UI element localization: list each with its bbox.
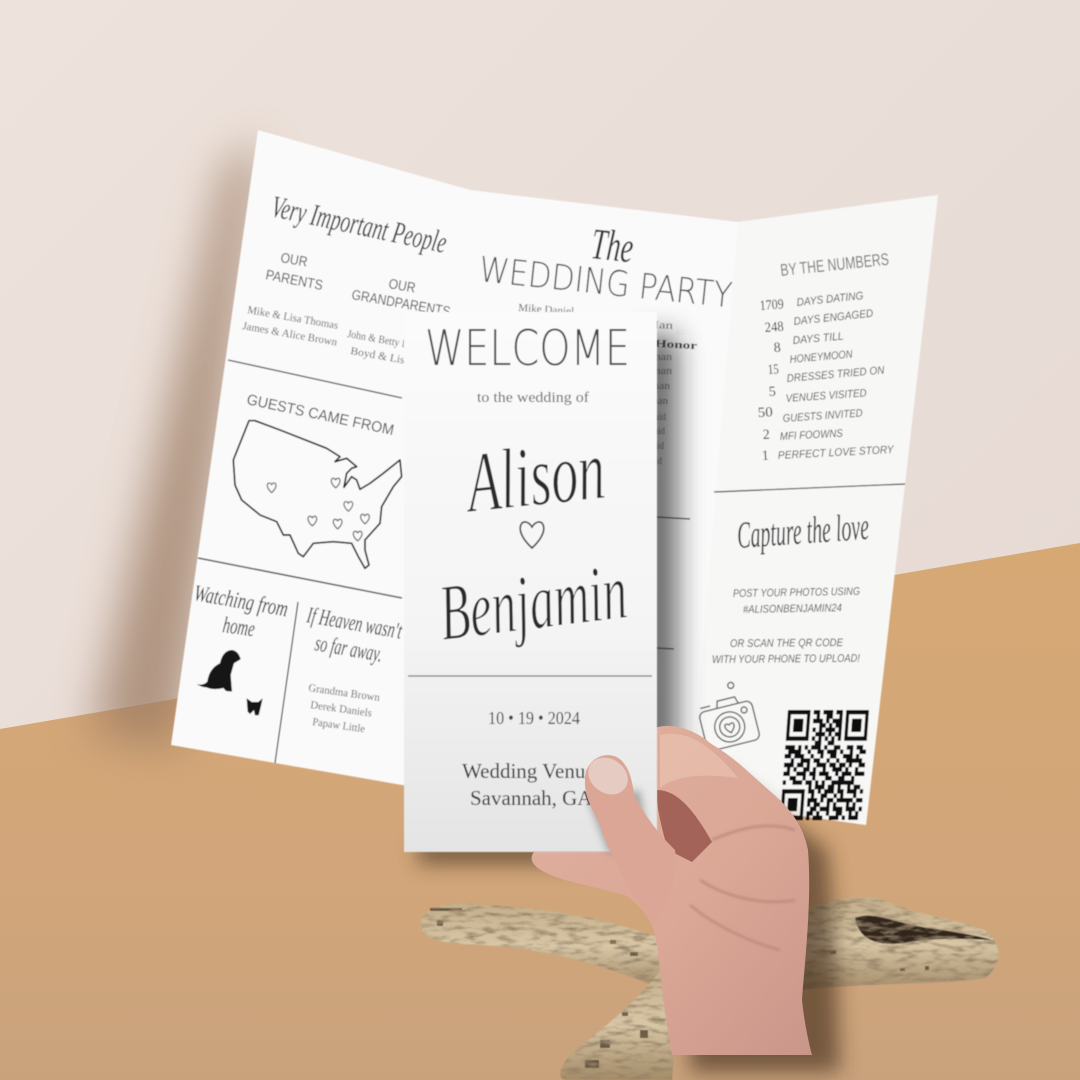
panel: capture the love [693, 506, 870, 818]
stats list: 2 [762, 428, 770, 443]
thumb nail [581, 750, 635, 802]
instructions: OR SCAN THE QR CODE [730, 637, 844, 650]
thumb shadow on card [588, 790, 650, 852]
icon: dogs [197, 650, 263, 715]
stats list [757, 297, 784, 464]
names: memorial [308, 682, 381, 735]
hand: palm and fingers behind card [532, 726, 812, 1055]
hand: thumb [581, 750, 676, 925]
wood knot: dark patch [855, 916, 992, 944]
panel: watching from home [192, 580, 290, 715]
welcome card [404, 312, 657, 852]
finger fold shadow [657, 790, 712, 862]
stats list: 50 [757, 405, 773, 421]
stats labels: VENUES VISITED [785, 387, 867, 405]
stats labels: GUESTS INVITED [782, 407, 863, 425]
panel: very important people [241, 189, 452, 367]
wood specks [430, 908, 929, 1068]
names: parents: James & Alice Brown [241, 320, 339, 349]
leaflet paper [171, 130, 938, 825]
tan floor [0, 543, 1080, 1080]
branch: right [790, 897, 998, 990]
stats labels: MFI FOOWNS [780, 428, 844, 443]
divider [408, 675, 652, 677]
driftwood [421, 897, 998, 1080]
stats list: 248 [764, 320, 784, 336]
heading: wedding party: WEDDING PARTY [477, 250, 734, 317]
names: memorial: Derek Daniels [310, 699, 373, 720]
heading: watching from home [192, 580, 290, 641]
venue: Wedding Venue [462, 759, 595, 783]
names: wedding party: Maid of Honor [600, 335, 697, 352]
stats labels: DRESSES TRIED ON [786, 364, 885, 385]
label: our parents [264, 249, 324, 293]
names: parents: Mike & Lisa Thomas [246, 304, 339, 332]
names: wedding party: Groomsmaid [620, 411, 666, 423]
instructions [712, 586, 860, 666]
icon: heart [520, 522, 544, 548]
names: wedding party: Mike Daniel [518, 302, 574, 318]
stats labels: PERFECT LOVE STORY [778, 444, 895, 462]
names: wedding party: Bridesman [620, 380, 671, 392]
label: our parents: OUR [279, 249, 309, 270]
stats labels: DAYS DATING [796, 290, 864, 309]
heading: if heaven: so far away. [313, 630, 384, 667]
qr code [780, 712, 869, 818]
branch: left [421, 904, 660, 988]
icon: camera [693, 679, 761, 752]
divider [640, 516, 690, 649]
heading: if heaven [305, 602, 404, 667]
stats labels: HONEYMOON [789, 349, 853, 366]
label: our parents: PARENTS [264, 266, 324, 293]
card paper [404, 312, 657, 852]
branch: lower [560, 968, 675, 1080]
map hearts [267, 478, 369, 541]
names: wedding party [518, 302, 697, 467]
hand cast shadow [690, 770, 840, 1072]
stats labels [778, 290, 895, 462]
folded leaflet [171, 130, 938, 825]
panel: by the numbers [757, 250, 895, 464]
label: our grandparents: GRANDPARENTS [350, 286, 452, 319]
instructions: POST YOUR PHOTOS USING [733, 586, 860, 600]
stats labels: DAYS TILL [792, 331, 844, 347]
names: wedding party: Groomsmaid [620, 440, 664, 452]
heading: watching from home: Watching from [192, 580, 290, 621]
names: parents [241, 304, 339, 349]
names: memorial: Grandma Brown [308, 682, 381, 704]
heading: watching from home: home [221, 612, 256, 641]
heading: capture the love: Capture the love [736, 506, 870, 557]
panel: guests came from [233, 391, 402, 568]
palm creases [690, 826, 795, 950]
heading: the: The [589, 219, 636, 272]
names: grandparents: John & Betty Lee [346, 328, 418, 352]
names: memorial: Papaw Little [312, 716, 366, 735]
date: 10 • 19 • 2024 [488, 708, 580, 728]
heading: very important people: Very Important People [269, 189, 450, 260]
names: wedding party: Bridesman [620, 351, 673, 363]
label: our grandparents: OUR [387, 275, 417, 296]
instructions: #ALISONBENJAMIN24 [743, 602, 842, 616]
names: wedding party: Groomsmaid [620, 455, 662, 467]
finger highlight [660, 734, 738, 788]
heading: if heaven: If Heaven wasn't [305, 602, 404, 644]
label: our grandparents [350, 275, 452, 319]
title: welcome: WELCOME [425, 320, 630, 377]
fold shading: right panel [690, 195, 938, 825]
stats labels: DAYS ENGAGED [793, 308, 874, 328]
venue: Savannah, GA [470, 786, 593, 810]
names: grandparents [346, 328, 418, 367]
names: wedding party: Bridesman [620, 395, 668, 407]
divider [228, 360, 402, 398]
name: alison: Alison [459, 421, 609, 531]
panel: if heaven wasn't so far away [305, 602, 404, 735]
panel: the wedding party [477, 219, 734, 467]
subtitle: to the wedding of [477, 390, 589, 406]
leaflet cast shadow [90, 140, 262, 750]
stats list: 1 [761, 449, 769, 464]
stats list: 1709 [759, 297, 784, 314]
name: benjamin: Benjamin [434, 548, 632, 658]
divider [198, 558, 402, 598]
venue [462, 759, 595, 810]
heading: guests came from: GUESTS CAME FROM [245, 391, 395, 439]
card cast shadow [418, 335, 676, 864]
divider [714, 484, 905, 492]
map: united states [233, 421, 402, 568]
names: wedding party: Best Man [615, 317, 674, 332]
names: grandparents: Boyd & Lisa [349, 345, 411, 367]
heading: by the numbers: BY THE NUMBERS [779, 250, 890, 280]
instructions: WITH YOUR PHONE TO UPLOAD! [712, 653, 860, 666]
names: wedding party: Groomsmaid [620, 425, 665, 437]
names: wedding party: Bridesman [620, 365, 673, 377]
divider [275, 602, 298, 763]
stats list: 5 [768, 385, 776, 400]
stats list: 8 [773, 341, 781, 356]
stats list: 15 [767, 362, 779, 378]
